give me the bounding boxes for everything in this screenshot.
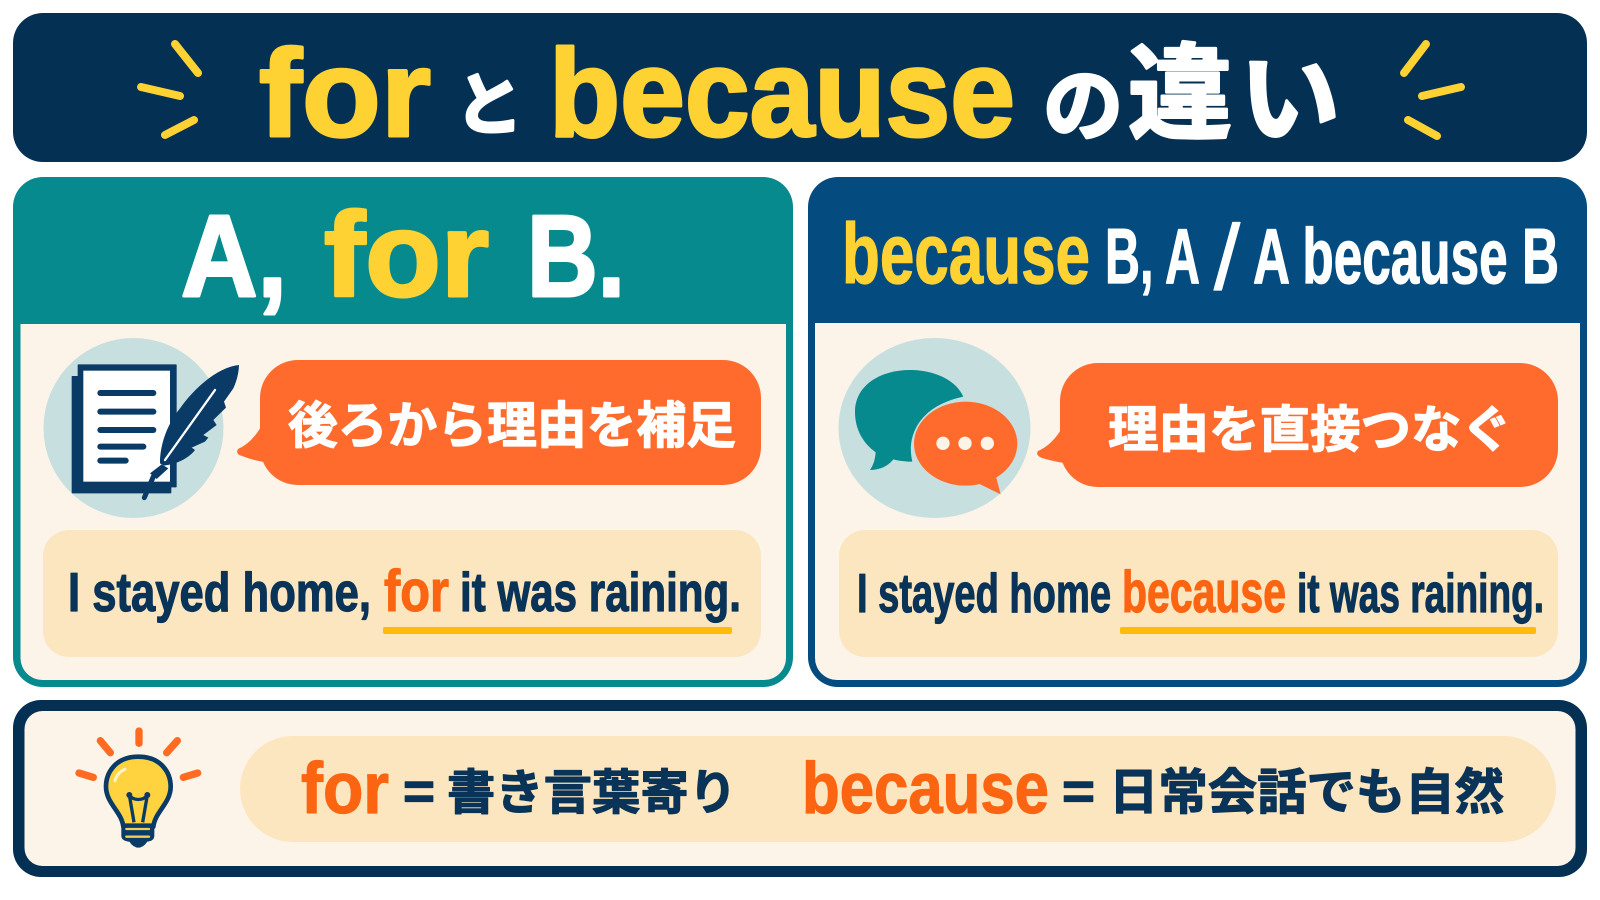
- title text: [259, 9, 1340, 163]
- heading: because B, A / A because B: because: [842, 207, 1090, 302]
- heading: A, for B.: for: [324, 188, 489, 322]
- panel body: [20, 324, 786, 680]
- example sentence: for: it was raining.: [460, 561, 741, 623]
- text: for is written language: =: [403, 763, 435, 821]
- callout: reason from behind: [237, 360, 761, 485]
- title text: for: [259, 25, 431, 163]
- icon: left sparkle: [141, 44, 198, 135]
- title text: because: [549, 25, 1015, 163]
- summary frame: [13, 700, 1587, 877]
- title text: の: [1043, 42, 1123, 158]
- banner background: [13, 13, 1587, 162]
- panel body: [815, 323, 1580, 680]
- callout: connects reason directly: [1037, 363, 1558, 487]
- text: for is written language: for: [301, 749, 389, 829]
- text: because is natural in conversation: =: [1062, 763, 1095, 821]
- panel: for: [13, 177, 793, 687]
- example sentence: because: I stayed home: [857, 562, 1111, 624]
- text: for is written language: [301, 749, 737, 829]
- icon: document and quill: [44, 338, 239, 518]
- callout: reason from behind: 後ろから理由を補足: [288, 386, 736, 458]
- title text: 違: [1128, 9, 1232, 160]
- example sentence: because: [839, 530, 1558, 657]
- heading: because B, A / A because B: /: [1214, 207, 1240, 309]
- heading: because B, A / A because B: [842, 207, 1559, 309]
- example sentence: for: [43, 530, 761, 657]
- underline: [1120, 627, 1536, 634]
- summary pill: [240, 736, 1556, 842]
- title text: と: [455, 50, 523, 149]
- icon: speech bubbles: [838, 338, 1030, 518]
- heading: A, for B.: B.: [527, 191, 625, 321]
- panel frame: [808, 177, 1587, 687]
- heading: A, for B.: A,: [181, 191, 287, 321]
- icon: right sparkle: [1404, 44, 1461, 136]
- text: because is natural in conversation: 日常会話でも自然: [1109, 753, 1504, 824]
- example sentence: because: because: [1122, 560, 1286, 625]
- summary panel: [13, 700, 1587, 877]
- heading: A, for B.: [181, 188, 625, 322]
- icon: light bulb: [79, 731, 198, 848]
- example sentence: for: I stayed home,: [68, 561, 371, 623]
- text: because is natural in conversation: [802, 749, 1504, 829]
- example sentence: for: for: [384, 559, 449, 624]
- underline: [383, 627, 732, 634]
- panel frame: [13, 177, 793, 687]
- callout: connects reason directly: 理由を直接つなぐ: [1108, 390, 1512, 462]
- text: because is natural in conversation: because: [802, 749, 1049, 829]
- panel: because: [808, 177, 1587, 687]
- text: for is written language: 書き言葉寄り: [447, 753, 737, 823]
- title banner: [13, 9, 1587, 163]
- title text: い: [1240, 18, 1340, 163]
- heading: because B, A / A because B: B, A: [1105, 212, 1200, 300]
